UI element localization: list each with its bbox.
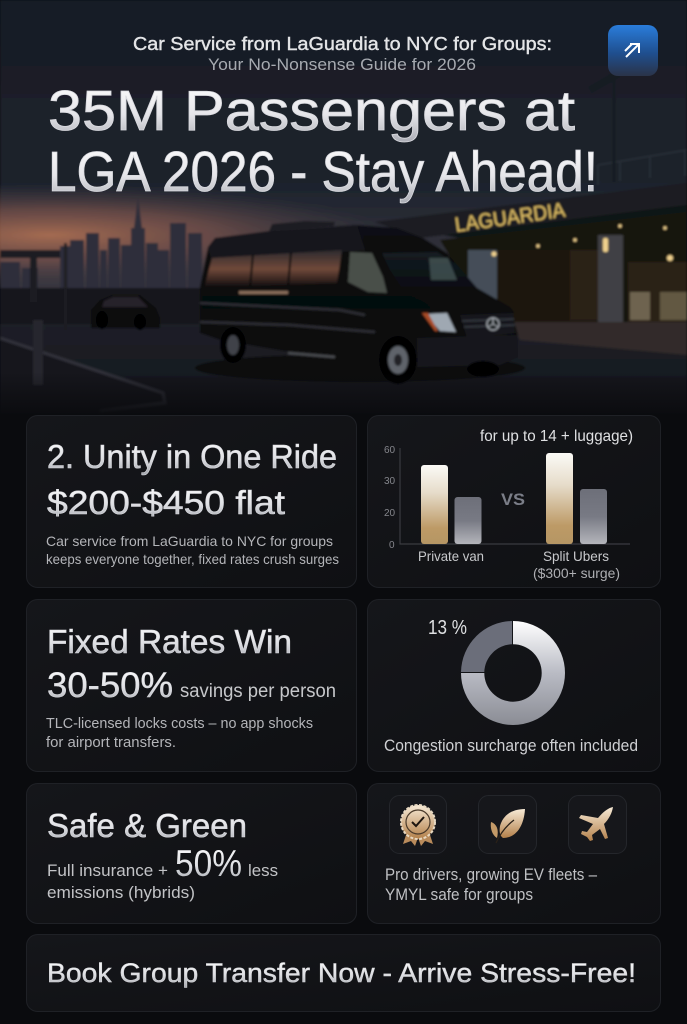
description: Pro drivers, growing EV fleets – (385, 866, 598, 884)
icon: airplane (568, 796, 626, 854)
headlight (425, 313, 456, 332)
vs label: VS (501, 490, 525, 509)
icon: leaf (478, 796, 536, 854)
hero fade into page (0, 372, 687, 418)
emissions text: Full insurance + (47, 861, 168, 880)
savings stat (47, 666, 336, 705)
door window (348, 252, 387, 293)
description: YMYL safe for groups (385, 886, 533, 904)
panel: fixed rates win (26, 600, 356, 772)
description: Car service from LaGuardia to NYC for groups (46, 533, 333, 549)
sidewalk (510, 322, 687, 355)
emissions text: 50% (175, 843, 242, 884)
waterfront band (0, 288, 210, 326)
passenger van (195, 221, 525, 384)
main headline: LGA 2026 - Stay Ahead! (48, 140, 598, 204)
description: TLC-licensed locks costs – no app shocks (46, 716, 313, 732)
parking island curb and bollard (0, 340, 165, 412)
heading: Safe & Green (47, 807, 247, 844)
rooftop rail and lamp (590, 74, 687, 185)
body lines (200, 303, 375, 332)
savings stat: 30-50% (47, 666, 173, 705)
grille and logo (460, 313, 515, 338)
header subtitle: Your No-Nonsense Guide for 2026 (208, 55, 476, 74)
panel: congestion surcharge donut (368, 600, 660, 772)
category labels: ($300+ surge) (533, 565, 620, 581)
terminal building (375, 183, 687, 322)
description: keeps everyone together, fixed rates crush surges (46, 551, 339, 567)
axis labels: 20 (384, 508, 396, 519)
panel: unity in one ride (26, 416, 356, 588)
description (46, 533, 339, 567)
icon: arrow app badge (608, 25, 658, 76)
wheels (220, 327, 246, 363)
header subtitle (133, 34, 552, 74)
emissions text: emissions (hybrids) (47, 883, 195, 902)
savings stat: savings per person (180, 681, 336, 702)
hero photo: van at LaGuardia at dusk (0, 0, 687, 414)
panel: safe and green (26, 784, 356, 924)
main headline (48, 79, 598, 204)
terminal lights (492, 224, 673, 261)
heading: 2. Unity in One Ride (47, 438, 337, 475)
shelter and poles (0, 243, 67, 330)
panel: trust icons (368, 784, 660, 924)
hood (405, 288, 515, 316)
category labels (418, 548, 620, 581)
side windows (205, 250, 342, 288)
black sedan (91, 295, 160, 330)
city skyline (0, 197, 202, 292)
category labels: Split Ubers (543, 548, 609, 564)
call to action text: Book Group Transfer Now - Arrive Stress-Free! (47, 958, 636, 988)
description (46, 716, 313, 751)
emissions text: less (248, 861, 278, 880)
header subtitle: Car Service from LaGuardia to NYC for Groups: (133, 34, 552, 54)
donut percentage: 13 % (428, 617, 467, 639)
panel: call to action (26, 934, 660, 1012)
description (385, 866, 598, 904)
description: for airport transfers. (46, 735, 176, 751)
bars: split ubers (546, 453, 607, 544)
bars: private van (421, 465, 482, 544)
heading: Fixed Rates Win (47, 623, 292, 660)
LaGuardia sign: LAGUARDIA (453, 199, 567, 237)
axis labels: 60 (384, 445, 396, 456)
dusk sky (0, 0, 687, 300)
panel: price comparison bar chart (368, 416, 660, 588)
axis labels: 30 (384, 476, 396, 487)
axis labels (384, 445, 396, 551)
chart caption: for up to 14 + luggage) (480, 428, 633, 445)
price: $200-$450 flat (47, 484, 285, 521)
axis labels: 0 (389, 540, 395, 551)
category labels: Private van (418, 548, 484, 564)
bumper (417, 335, 518, 367)
ground (0, 324, 687, 414)
donut caption: Congestion surcharge often included (384, 737, 638, 755)
main headline: 35M Passengers at (48, 79, 575, 143)
emissions text (47, 843, 278, 902)
icon: award badge (390, 796, 446, 854)
windshield (382, 252, 477, 290)
donut chart (461, 621, 565, 725)
